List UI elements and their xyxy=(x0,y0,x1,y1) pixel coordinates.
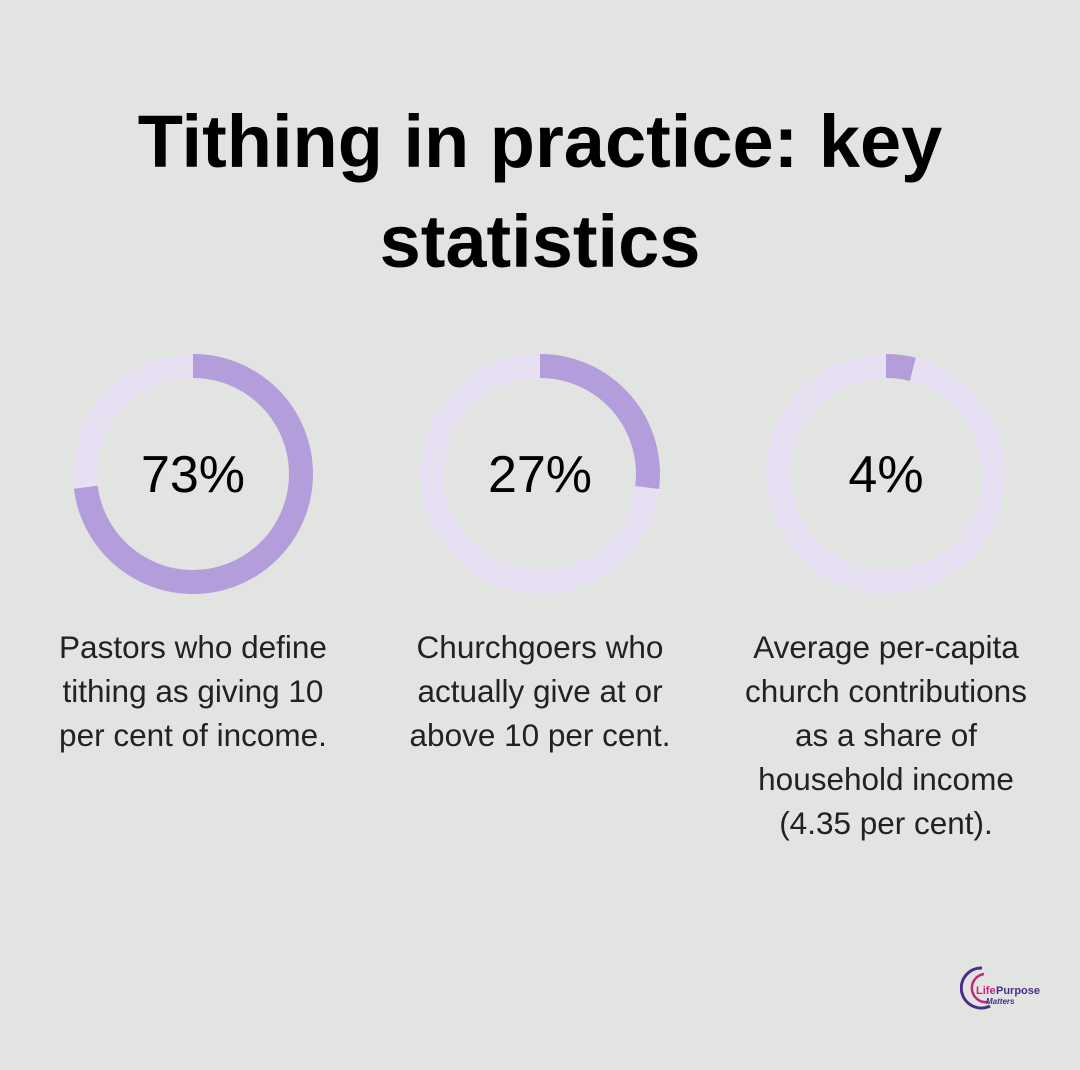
text: churchgoers: actually give at or xyxy=(417,673,663,709)
text: average: household income xyxy=(758,761,1014,797)
text: average: (4.35 per cent). xyxy=(779,805,993,841)
text: pastors: Pastors who define xyxy=(59,629,327,665)
text: pastors xyxy=(59,629,327,753)
text: average xyxy=(745,629,1027,841)
logo: Life xyxy=(976,985,996,997)
logo xyxy=(960,966,1040,1010)
donut: 4% xyxy=(766,354,1006,594)
text: churchgoers xyxy=(410,629,670,753)
logo: Purpose xyxy=(996,985,1040,997)
title xyxy=(138,100,942,283)
text: average: as a share of xyxy=(795,717,977,753)
logo: Matters xyxy=(986,997,1015,1006)
text: average: church contributions xyxy=(745,673,1027,709)
text: churchgoers: above 10 per cent. xyxy=(410,717,670,753)
donut: 73% xyxy=(73,354,313,594)
title: Tithing in practice: key xyxy=(138,100,942,183)
text: pastors: tithing as giving 10 xyxy=(63,673,323,709)
text: pastors: per cent of income. xyxy=(59,717,327,753)
donut: 27%: 27% xyxy=(488,446,592,504)
text: churchgoers: Churchgoers who xyxy=(417,629,663,665)
donut: 27% xyxy=(420,354,660,594)
donut: 73%: 73% xyxy=(141,446,245,504)
donut: 4%: 4% xyxy=(848,446,924,504)
title: statistics xyxy=(380,200,700,283)
text: average: Average per-capita xyxy=(753,629,1019,665)
